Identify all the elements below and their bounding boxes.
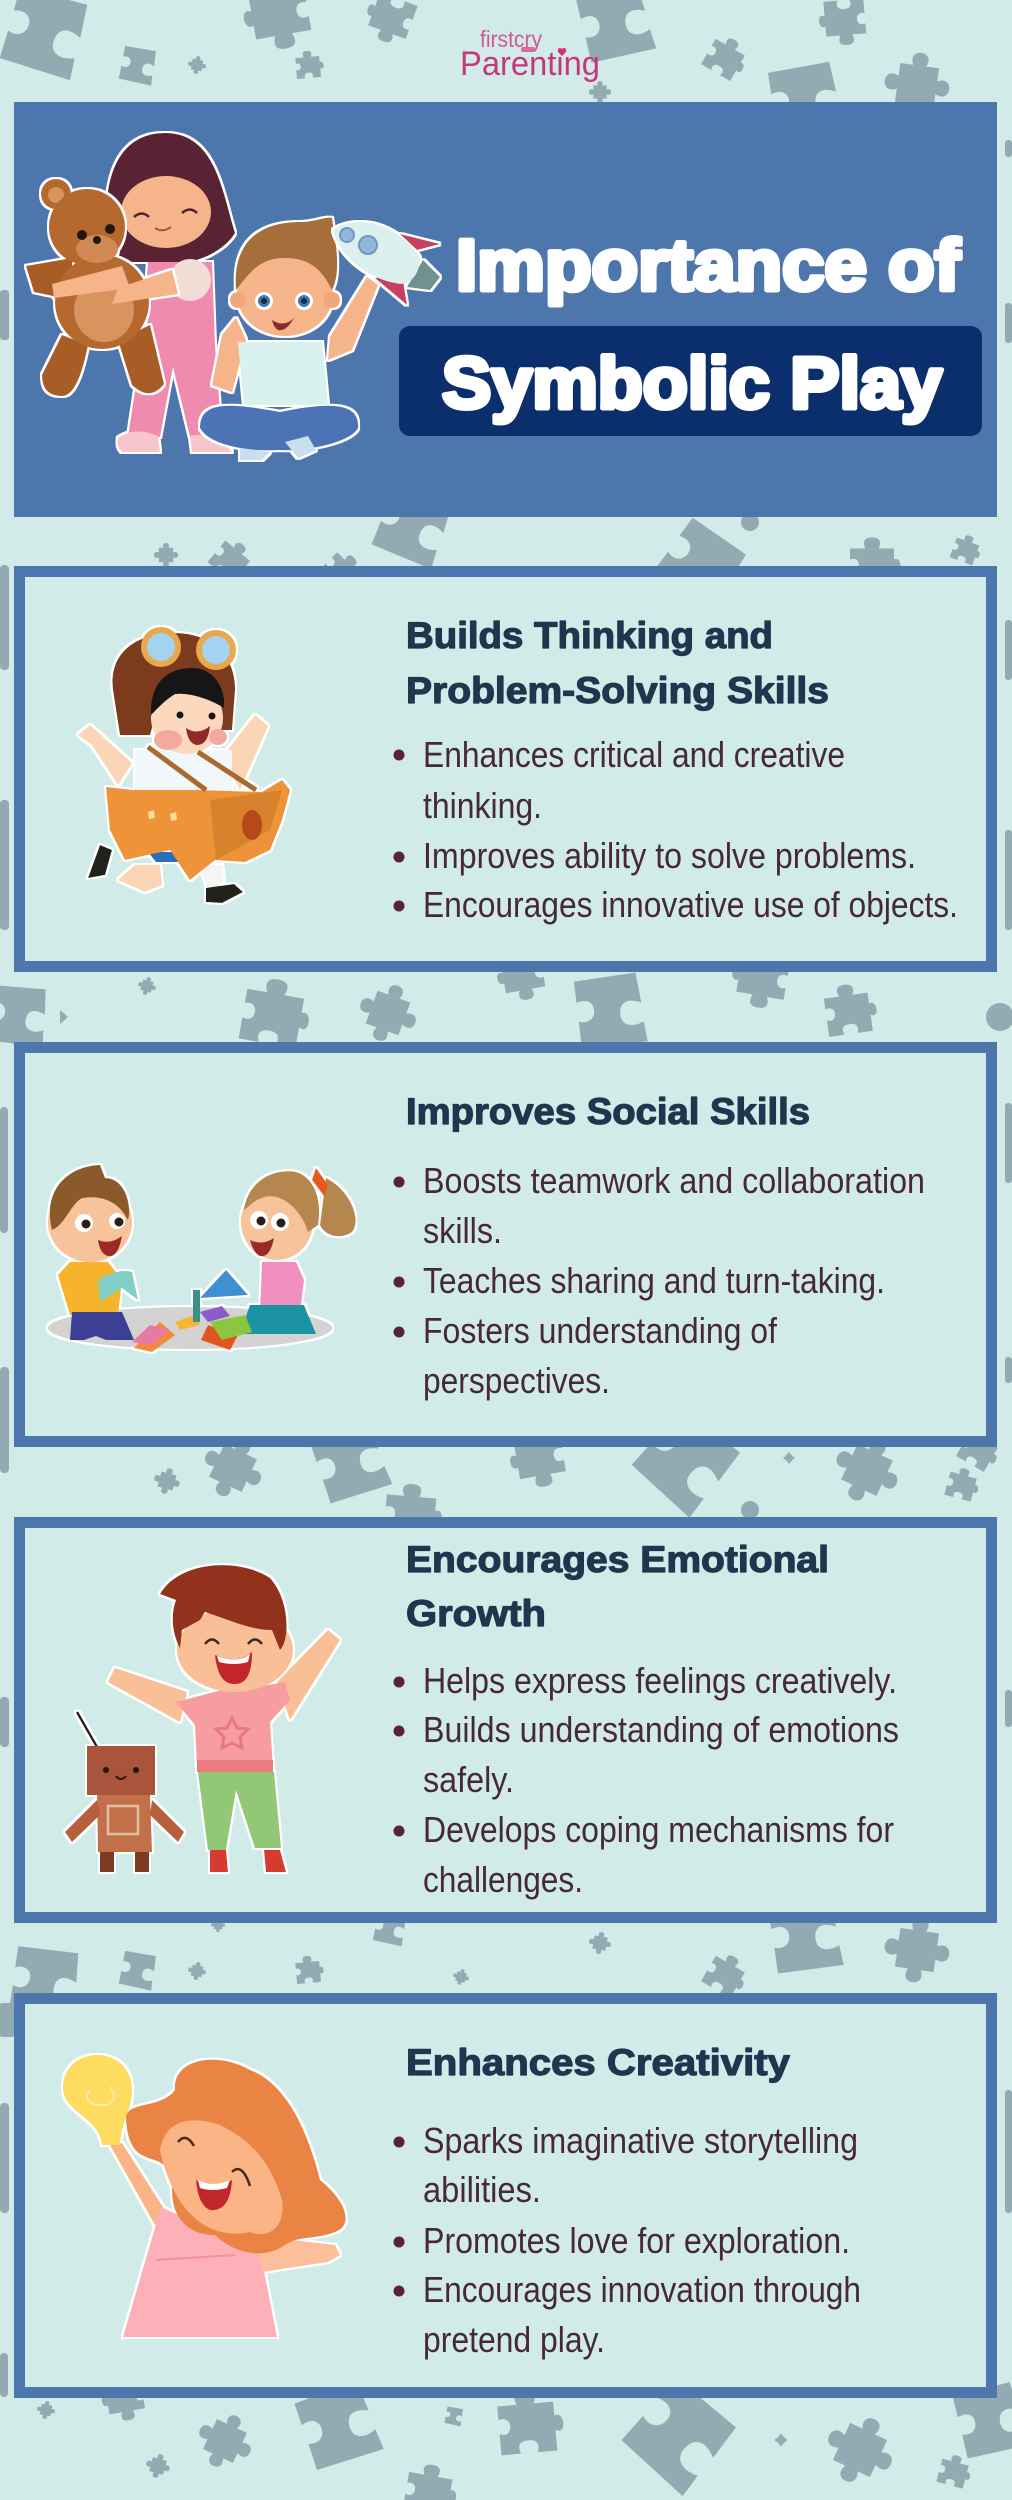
bullet list: Fosters understanding of xyxy=(423,1310,778,1351)
bullet list: Enhances critical and creative xyxy=(423,734,845,775)
bullet list: Improves ability to solve problems. xyxy=(423,835,916,876)
heading: Improves Social Skills xyxy=(406,1091,810,1132)
panel: emotional growth xyxy=(20,1522,992,1918)
heading: Builds Thinking and xyxy=(406,615,773,656)
bullet list: Promotes love for exploration. xyxy=(423,2220,850,2261)
bullet list: Encourages innovative use of objects. xyxy=(423,884,958,925)
title ribbon: Symbolic Play: Symbolic Play xyxy=(442,344,942,424)
bullet list xyxy=(394,1660,899,1900)
illustration: cardboard robot xyxy=(65,1712,184,1872)
bullet list: abilities. xyxy=(423,2169,541,2210)
illustration: two children crafting with paper xyxy=(48,1165,356,1352)
heading: Growth xyxy=(406,1593,546,1634)
illustration: child in cardboard plane xyxy=(78,630,290,903)
illustration: teddy bear xyxy=(26,179,178,396)
illustration: boy holding a rocket xyxy=(200,218,378,460)
panel: thinking and problem-solving xyxy=(20,572,992,966)
bullet list: pretend play. xyxy=(423,2319,605,2360)
illustration: toy rocket xyxy=(333,222,440,305)
illustration: girl holding a light bulb xyxy=(63,2055,346,2337)
title ribbon: Symbolic Play xyxy=(399,326,982,436)
bullet list: Builds understanding of emotions xyxy=(423,1709,899,1750)
heading: Problem-Solving Skills xyxy=(406,670,829,711)
heading: Enhances Creativity xyxy=(406,2042,790,2083)
logo: FirstCry Parenting xyxy=(460,26,600,83)
heading: Encourages Emotional xyxy=(406,1539,829,1580)
bullet list: challenges. xyxy=(423,1859,583,1900)
illustration: cheering boy xyxy=(108,1565,340,1872)
bullet list: Encourages innovation through xyxy=(423,2269,861,2310)
bullet list xyxy=(394,1160,925,1401)
panel: header banner xyxy=(14,102,997,517)
panel: creativity xyxy=(20,1998,992,2392)
heading xyxy=(406,1539,829,1634)
bullet list: Helps express feelings creatively. xyxy=(423,1660,897,1701)
bullet list: perspectives. xyxy=(423,1360,610,1401)
bullet list: safely. xyxy=(423,1759,514,1800)
logo: FirstCry Parenting: Parenting xyxy=(460,45,600,83)
logo: FirstCry Parenting: firstcry xyxy=(480,26,542,52)
heading xyxy=(406,615,829,711)
bullet list: Sparks imaginative storytelling xyxy=(423,2120,858,2161)
bullet list: Boosts teamwork and collaboration xyxy=(423,1160,925,1201)
illustration: girl hugging a teddy bear xyxy=(106,133,235,452)
bullet list: skills. xyxy=(423,1210,502,1251)
title line: Importance of: Importance of xyxy=(456,226,961,306)
bullet list: thinking. xyxy=(423,785,542,826)
panel: social skills xyxy=(20,1048,992,1442)
bullet list xyxy=(394,2120,861,2360)
bullet list: Teaches sharing and turn-taking. xyxy=(423,1260,885,1301)
bullet list xyxy=(394,734,958,925)
bullet list: Develops coping mechanisms for xyxy=(423,1809,894,1850)
